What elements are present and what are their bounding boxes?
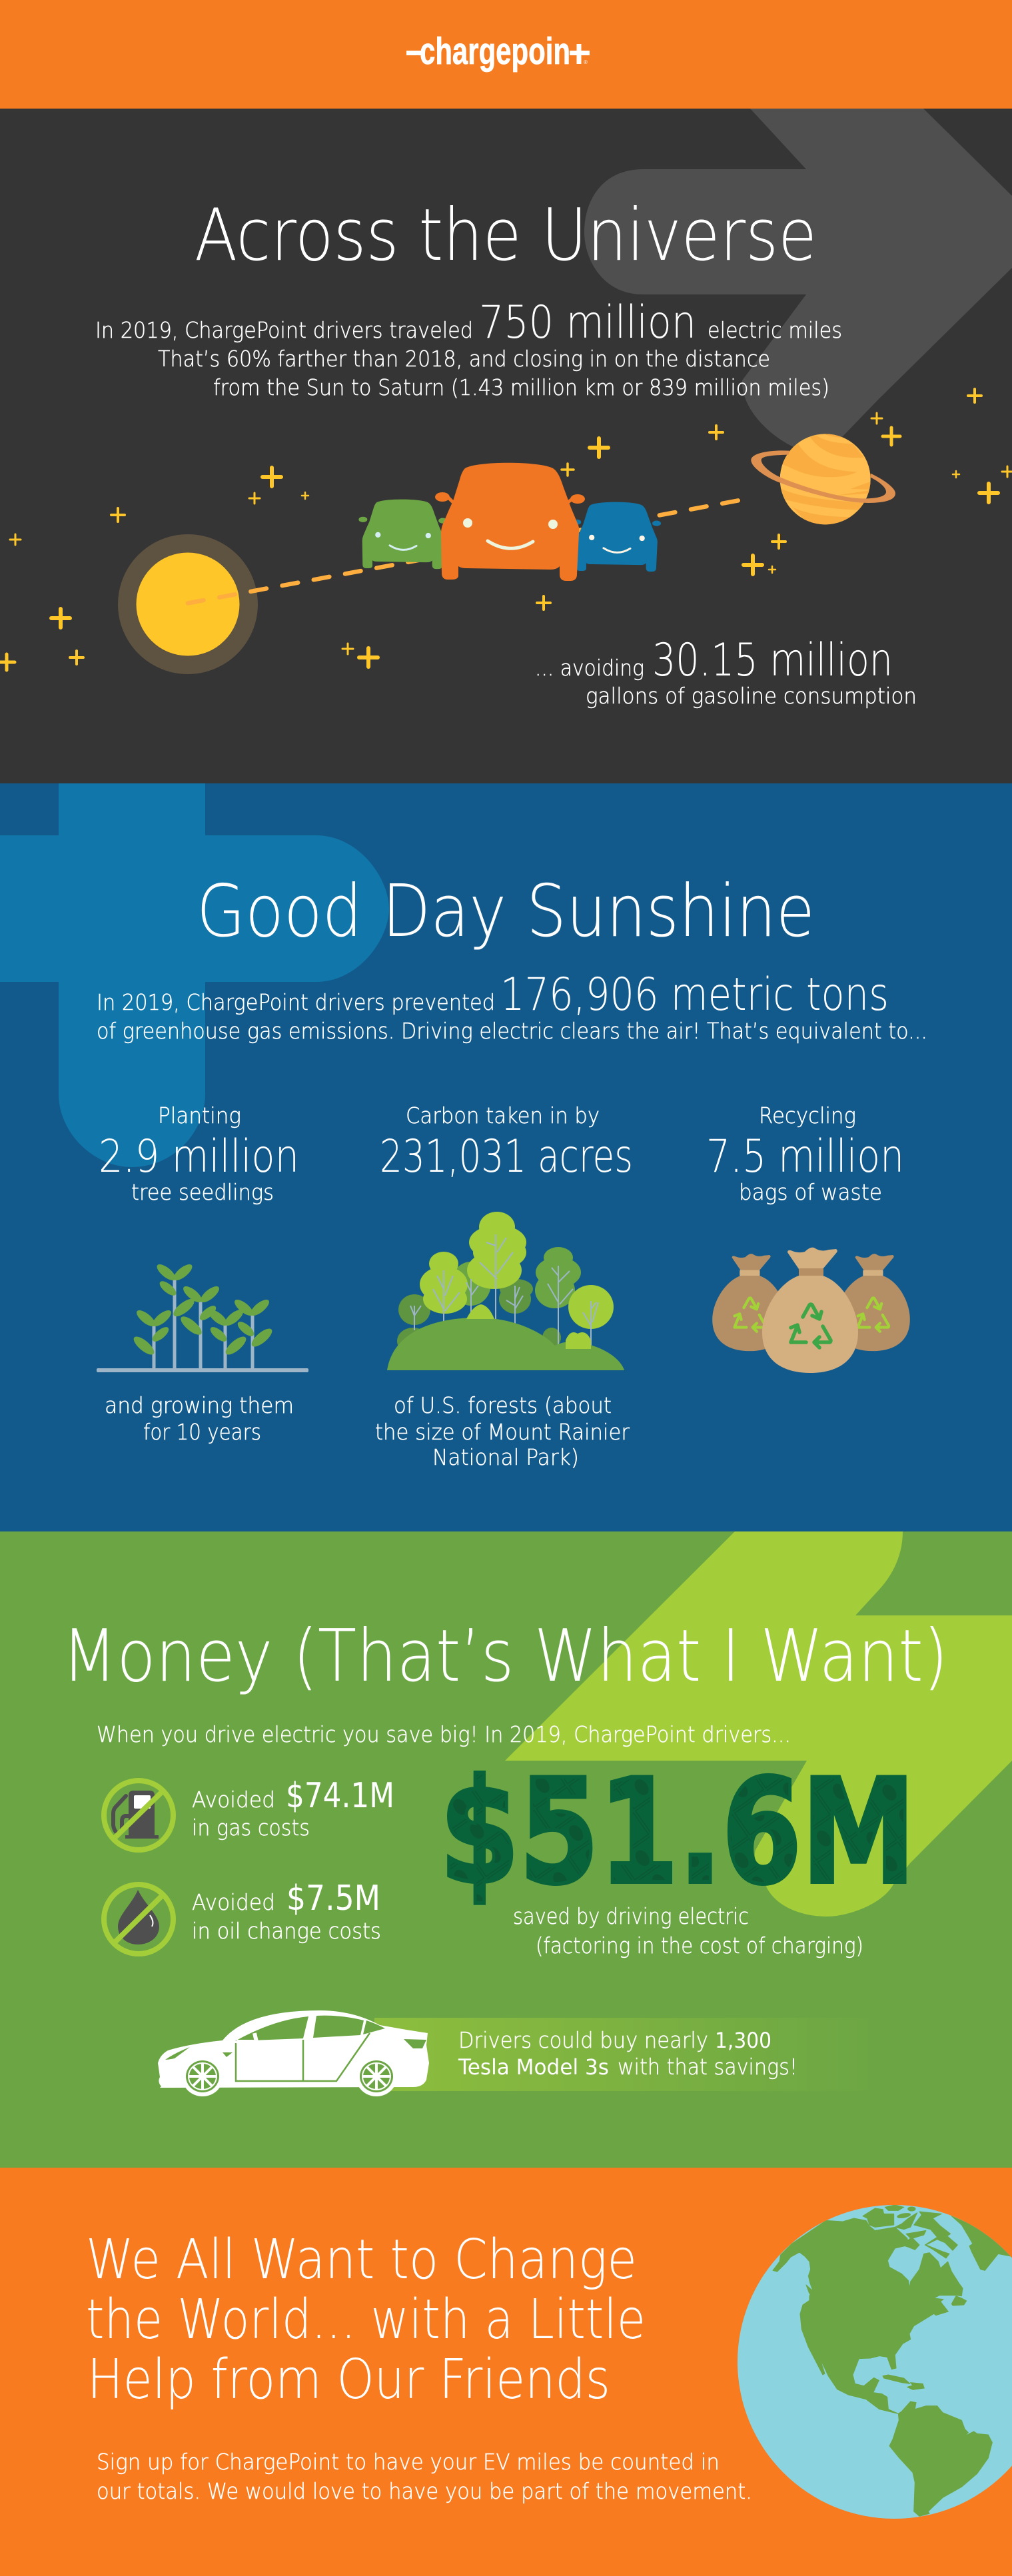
wheel: front <box>182 2056 223 2096</box>
stat: planting seedlings: tree seedlings <box>131 1179 274 1205</box>
text: forest caption: the size of Mount Rainier <box>375 1419 630 1445</box>
text: forest caption: of U.S. forests (about <box>394 1392 612 1418</box>
text: saved caption: saved by driving electric <box>513 1903 749 1929</box>
heading: change the world: We All Want to Change <box>86 2228 637 2292</box>
text: miles traveled <box>95 296 842 400</box>
illustration: white car <box>158 2010 429 2096</box>
illustration: blue car <box>572 502 661 572</box>
text: oil costs: in oil change costs <box>192 1918 381 1944</box>
newfoundland <box>951 2296 967 2306</box>
text: gas costs: Avoided <box>192 1787 275 1813</box>
arctic islands <box>863 2208 894 2227</box>
text: miles traveled: That’s 60% farther than 2018, and closing in on the distance <box>158 346 770 372</box>
text: oil costs: $7.5M <box>286 1879 380 1919</box>
text: miles traveled: 750 million <box>479 296 696 349</box>
panel: change the world <box>0 2168 1012 2576</box>
text: emissions prevented: of greenhouse gas emissions. Driving electric clears the air! That’s equivalent to... <box>97 1018 927 1044</box>
text: tesla callout: 1,300 <box>715 2028 771 2053</box>
south america <box>889 2401 992 2516</box>
text: miles traveled: In 2019, ChargePoint drivers traveled <box>95 317 473 343</box>
baja notch <box>806 2285 812 2294</box>
logo: chargepoint: ® <box>584 59 588 65</box>
greenland <box>951 2216 1012 2270</box>
text: saved caption <box>513 1903 863 1958</box>
text: gasoline avoided <box>535 634 917 709</box>
text: oil costs <box>192 1879 381 1944</box>
stars <box>0 389 1012 670</box>
stat: planting seedlings: Planting <box>158 1102 241 1128</box>
heading: change the world <box>86 2228 646 2411</box>
illustration: sun <box>118 534 258 674</box>
heading: Good Day Sunshine: Good Day Sunshine <box>197 870 815 953</box>
text: gasoline avoided: gallons of gasoline consumption <box>586 683 917 709</box>
text: miles traveled: electric miles <box>708 317 842 343</box>
bag: left <box>712 1254 787 1351</box>
dashed route <box>188 500 740 604</box>
text: gas costs: in gas costs <box>192 1815 310 1841</box>
stat: recycling bags: bags of waste <box>739 1179 882 1205</box>
text: emissions prevented <box>97 969 927 1044</box>
illustration: globe <box>738 2205 1012 2519</box>
illustration: saturn <box>751 432 895 526</box>
illustration: recycling bags <box>712 1248 910 1373</box>
text: growing caption <box>105 1392 294 1445</box>
text: sign up: our totals. We would love to have you be part of the movement. <box>97 2478 752 2504</box>
text: tesla callout: Drivers could buy nearly <box>458 2027 708 2053</box>
illustration: seedlings <box>97 1262 308 1372</box>
text: gasoline avoided: 30.15 million <box>652 634 893 687</box>
wheel: rear <box>356 2056 397 2096</box>
illustration: orange car <box>435 463 585 581</box>
panel: header <box>0 0 1012 109</box>
bag: centre <box>762 1248 858 1373</box>
stat: recycling bags <box>706 1102 904 1205</box>
illustration: forest <box>387 1212 624 1370</box>
stat: carbon acres: Carbon taken in by <box>406 1102 600 1128</box>
heading: change the world: Help from Our Friends <box>87 2348 610 2411</box>
panel: money <box>0 1531 1012 2168</box>
bag: right <box>835 1254 910 1351</box>
gradient band <box>374 2018 878 2091</box>
text: growing caption: and growing them <box>105 1392 294 1418</box>
background bolt <box>505 1531 1012 1917</box>
stat: recycling bags: Recycling <box>759 1102 856 1128</box>
text: forest caption: National Park) <box>432 1444 579 1470</box>
text: sign up: Sign up for ChargePoint to have your EV miles be counted in <box>97 2449 720 2475</box>
icon: no gas pump <box>104 1781 173 1850</box>
text: tesla callout <box>458 2027 797 2080</box>
caribbean islands <box>883 2375 910 2383</box>
icon: no oil drop <box>104 1885 173 1954</box>
stat: carbon acres: 231,031 acres <box>380 1130 633 1183</box>
background plus <box>0 783 389 1167</box>
panel: across the universe <box>0 109 1012 709</box>
stat: recycling bags: 7.5 million <box>706 1130 904 1183</box>
text: tesla callout: Tesla Model 3s <box>458 2054 609 2080</box>
stat: carbon acres <box>380 1102 633 1183</box>
text: saved caption: (factoring in the cost of charging) <box>536 1932 863 1958</box>
text: emissions prevented: In 2019, ChargePoint drivers prevented <box>97 989 495 1015</box>
text: gas costs: $74.1M <box>286 1776 394 1816</box>
text: growing caption: for 10 years <box>143 1419 261 1445</box>
text: emissions prevented: 176,906 metric tons <box>500 969 889 1021</box>
panel: good day sunshine <box>0 783 1012 1531</box>
stat: planting seedlings: 2.9 million <box>99 1130 299 1183</box>
text: gasoline avoided: ... avoiding <box>535 655 644 681</box>
text: gas costs <box>192 1776 394 1841</box>
illustration: green car <box>358 500 447 569</box>
text: sign up <box>97 2449 752 2504</box>
text: oil costs: Avoided <box>192 1889 275 1915</box>
text: intro: When you drive electric you save big! In 2019, ChargePoint drivers... <box>97 1721 791 1747</box>
text: forest caption <box>375 1392 630 1470</box>
stat: planting seedlings <box>99 1102 299 1205</box>
heading: Across the Universe: Across the Universe <box>195 194 817 277</box>
background arrow <box>584 109 1012 451</box>
text: tesla callout: with that savings! <box>618 2054 797 2080</box>
north america <box>773 2218 963 2413</box>
logo: chargepoint: chargepoin <box>420 30 570 73</box>
heading: change the world: the World... with a Little <box>86 2288 646 2352</box>
text: miles traveled: from the Sun to Saturn (1.43 million km or 839 million miles) <box>213 374 829 400</box>
small lake <box>929 2236 936 2238</box>
